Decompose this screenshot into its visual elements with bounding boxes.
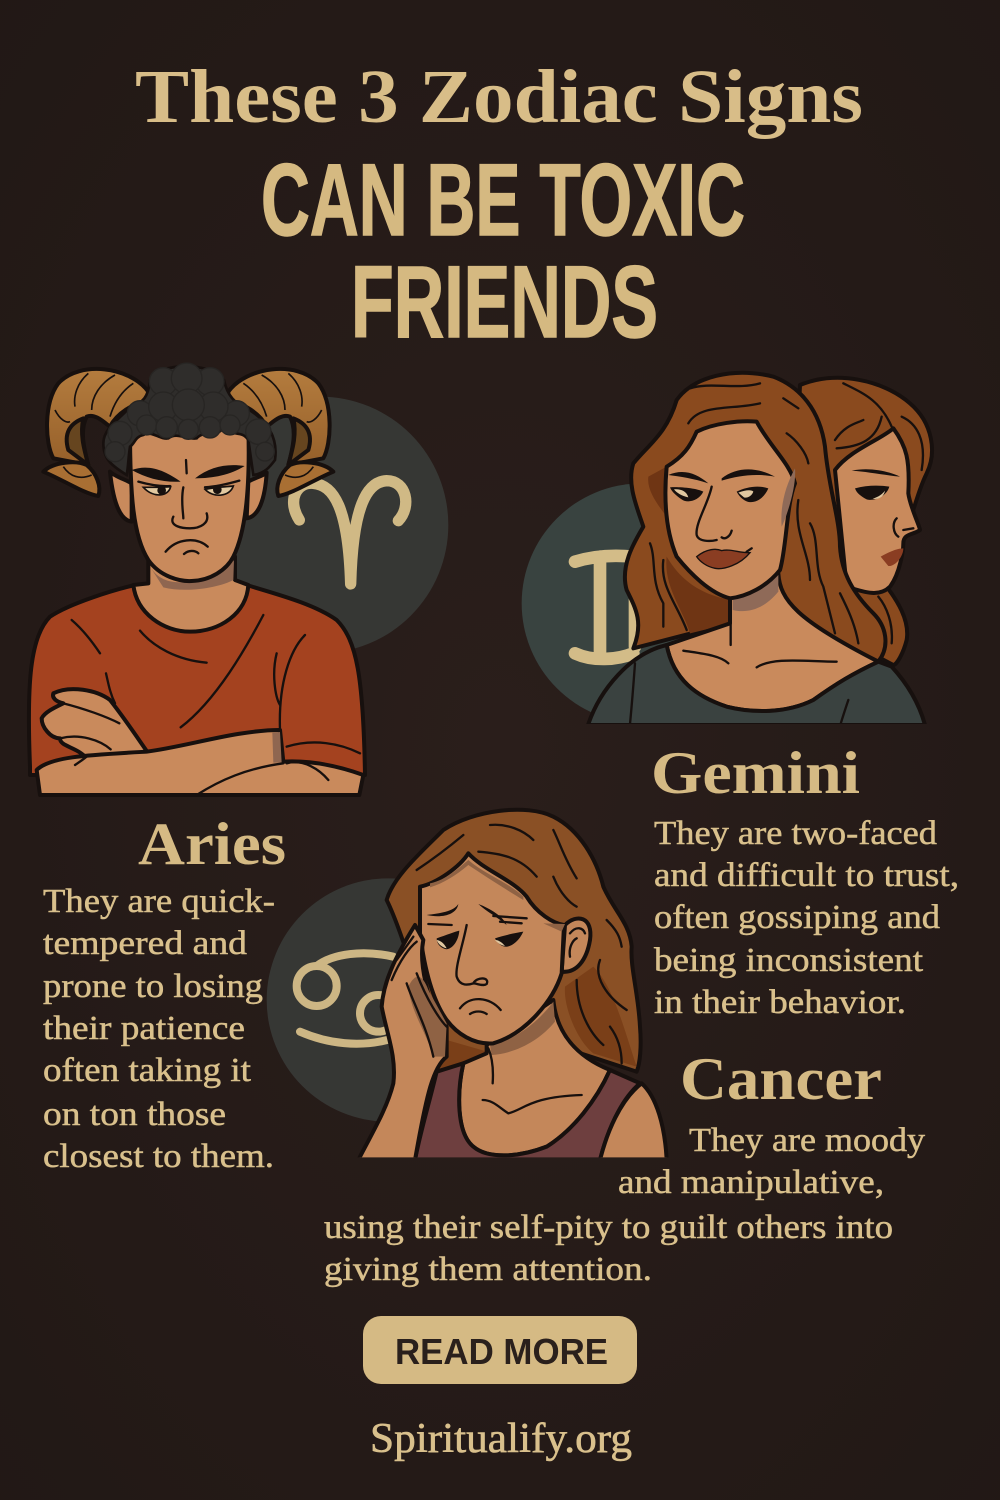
icon: Gemini symbol xyxy=(575,556,635,659)
text block: Aries description: on ton those xyxy=(43,1096,226,1133)
zodiac circle: Aries xyxy=(192,397,448,653)
curly hair xyxy=(103,363,276,475)
heading: Cancer: Cancer xyxy=(680,1046,882,1112)
text block: Aries description: prone to losing xyxy=(43,968,263,1005)
lower crossed arm xyxy=(37,730,363,795)
illustration: Cancer woman holding her head xyxy=(267,810,667,1160)
top xyxy=(588,645,925,725)
shirt and hand folds xyxy=(60,615,360,795)
text block: Cancer description: using their self-pity to guilt others into xyxy=(324,1209,893,1246)
icon: Aries symbol xyxy=(294,481,406,584)
front twin features xyxy=(781,468,795,527)
tank top xyxy=(415,1063,640,1160)
text block: Gemini description xyxy=(654,815,959,1021)
text block: Aries description: tempered and xyxy=(43,925,247,962)
brows and eyes xyxy=(132,465,245,482)
left horn xyxy=(43,369,148,496)
back twin features xyxy=(852,469,900,500)
text block: Aries description: closest to them. xyxy=(43,1138,274,1175)
face and body lines xyxy=(392,825,627,1113)
text block: Aries description: often taking it xyxy=(43,1052,252,1089)
ear xyxy=(562,918,590,972)
heading: Gemini: Gemini xyxy=(651,740,860,806)
illustration: Aries man with ram horns xyxy=(29,363,448,795)
title xyxy=(135,55,863,359)
neck and chest xyxy=(459,1000,610,1155)
icon: Cancer symbol xyxy=(297,953,397,1044)
neck and chest xyxy=(667,573,878,711)
text block: Gemini description: in their behavior. xyxy=(654,984,906,1021)
zodiac circle: Cancer xyxy=(266,878,402,1121)
text block: Cancer description xyxy=(324,1122,925,1288)
illustration: Gemini twin women xyxy=(522,373,932,725)
front twin dark hair xyxy=(648,467,731,633)
button: read more xyxy=(363,1316,637,1384)
text block: Gemini description: being inconsistent xyxy=(654,942,924,979)
face xyxy=(420,853,564,1043)
text block: Aries description: their patience xyxy=(43,1010,245,1047)
upper crossed hand xyxy=(42,689,148,758)
back twin hair xyxy=(797,378,932,665)
face xyxy=(130,428,249,581)
text block: Gemini description: They are two-faced xyxy=(654,815,937,852)
hair xyxy=(387,810,641,1072)
shoulder xyxy=(600,1083,667,1160)
title line: friends: FRIENDS xyxy=(351,245,658,359)
text block: Cancer description: They are moody xyxy=(689,1122,925,1159)
nose and frown xyxy=(138,460,239,554)
text block: Cancer description: and manipulative, xyxy=(618,1164,884,1201)
front twin hair xyxy=(625,373,885,662)
right horn xyxy=(228,369,333,496)
button: read more: READ MORE xyxy=(395,1331,608,1372)
text block: Gemini description: and difficult to trust, xyxy=(654,857,959,894)
hand and arm xyxy=(358,925,447,1160)
text block: Cancer description: giving them attention. xyxy=(324,1251,652,1288)
back twin face xyxy=(835,428,920,593)
front twin face xyxy=(665,421,795,598)
ears xyxy=(110,472,267,522)
face features xyxy=(427,904,523,949)
neck xyxy=(133,557,248,632)
heading: Aries: Aries xyxy=(138,811,286,877)
text block: Aries description: They are quick- xyxy=(43,883,275,920)
title line: These 3 Zodiac Signs: These 3 Zodiac Signs xyxy=(135,55,863,139)
title line: can be toxic: CAN BE TOXIC xyxy=(261,143,745,257)
text block: Gemini description: often gossiping and xyxy=(654,899,940,936)
shirt xyxy=(29,585,365,775)
zodiac circle: Gemini xyxy=(522,484,680,712)
footer: website: Spiritualify.org xyxy=(370,1416,632,1462)
text block: Aries description xyxy=(43,883,275,1175)
